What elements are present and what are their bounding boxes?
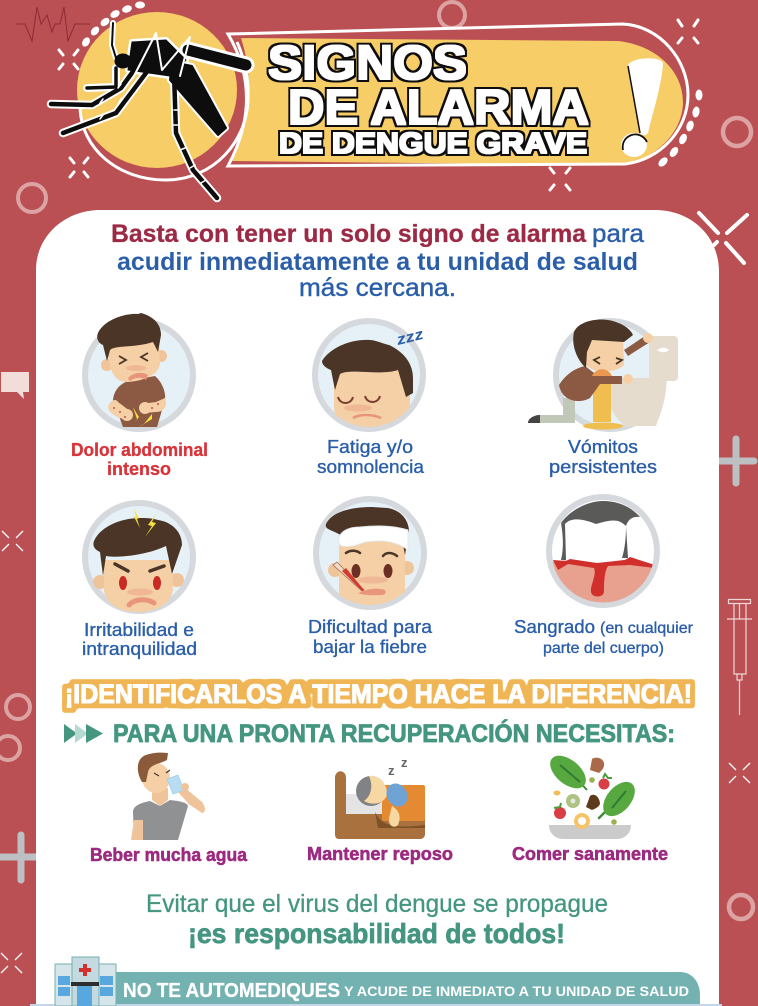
- label: persistentes: [549, 457, 657, 477]
- closing message: [146, 890, 608, 949]
- label: Beber mucha agua: [90, 845, 248, 865]
- label: intenso: [107, 459, 171, 479]
- footer text: [123, 980, 689, 1002]
- label: Sangrado: [514, 617, 595, 637]
- label: [82, 620, 197, 659]
- label: parte del cuerpo): [543, 640, 664, 657]
- symptom: fiebre: [316, 499, 424, 610]
- header banner shape: [228, 24, 688, 166]
- bottom strip: [30, 1004, 722, 1006]
- icon: heartbeat line: [16, 7, 90, 41]
- label: intranquilidad: [82, 639, 197, 659]
- recovery heading: PARA UNA PRONTA RECUPERACIÓN NECESITAS:: [113, 718, 675, 748]
- footer text: NO TE AUTOMEDIQUES: [123, 980, 340, 1002]
- label: [317, 437, 425, 477]
- label: bajar la fiebre: [313, 637, 427, 657]
- symptom: sangrado: [549, 497, 660, 620]
- icon: drinking water: [131, 753, 205, 840]
- icon: healthy food: [544, 749, 641, 839]
- symptom: vomitos: [528, 320, 678, 430]
- label: Dificultad para: [308, 617, 433, 637]
- label: [549, 437, 657, 477]
- orange slogan: ¡IDENTIFICARLOS A TIEMPO HACE LA DIFERENCIA!: [65, 679, 692, 709]
- icon: syringe: [727, 600, 752, 715]
- label: Comer sanamente: [512, 844, 668, 864]
- footer text: Y ACUDE DE INMEDIATO A TU UNIDAD DE SALUD: [344, 983, 689, 999]
- sparkle: panel corner: [699, 213, 747, 263]
- intro text: acudir inmediatamente a tu unidad de salud: [117, 248, 638, 276]
- white ring: [80, 42, 248, 180]
- label: [514, 617, 694, 657]
- decorative dots: [80, 2, 702, 168]
- intro text: Basta con tener un solo signo de alarma: [111, 220, 587, 248]
- label: Dolor abdominal: [71, 440, 208, 460]
- label: Fatiga y/o: [327, 437, 413, 457]
- title: DE ALARMA: [288, 81, 589, 135]
- white content panel: [36, 210, 719, 1006]
- label: Irritabilidad e: [84, 620, 194, 640]
- intro text: [111, 220, 644, 302]
- arrows: [64, 724, 103, 743]
- symptom: fatiga: zzz: [394, 326, 426, 349]
- symptom: dolor abdominal: [85, 313, 193, 429]
- closing message: Evitar que el virus del dengue se propague: [146, 890, 608, 918]
- footer bar: [100, 972, 700, 1005]
- label: somnolencia: [317, 457, 425, 477]
- yellow circle: [77, 12, 237, 168]
- label: [308, 617, 433, 657]
- title: DE DENGUE GRAVE: [279, 128, 587, 160]
- icon: hospital: [55, 957, 116, 1006]
- icon: exclamation mark: [621, 58, 663, 157]
- icon: resting in bed: z: [388, 763, 395, 778]
- title: SIGNOS: [268, 37, 467, 90]
- intro text: más cercana.: [299, 274, 456, 302]
- closing message: ¡es responsabilidad de todos!: [188, 918, 565, 949]
- icon: mosquito: [51, 23, 246, 198]
- label: Mantener reposo: [307, 844, 453, 864]
- label: [71, 440, 208, 479]
- title: [268, 37, 589, 160]
- label: (en cualquier: [600, 620, 694, 637]
- symptom: irritabilidad: [85, 503, 193, 612]
- icon: resting in bed: [335, 755, 425, 839]
- label: Vómitos: [568, 437, 638, 457]
- symptom: fatiga: [315, 321, 426, 429]
- icon: resting in bed: z: [401, 755, 408, 770]
- intro text: para: [592, 220, 644, 248]
- sparkles: [59, 20, 698, 190]
